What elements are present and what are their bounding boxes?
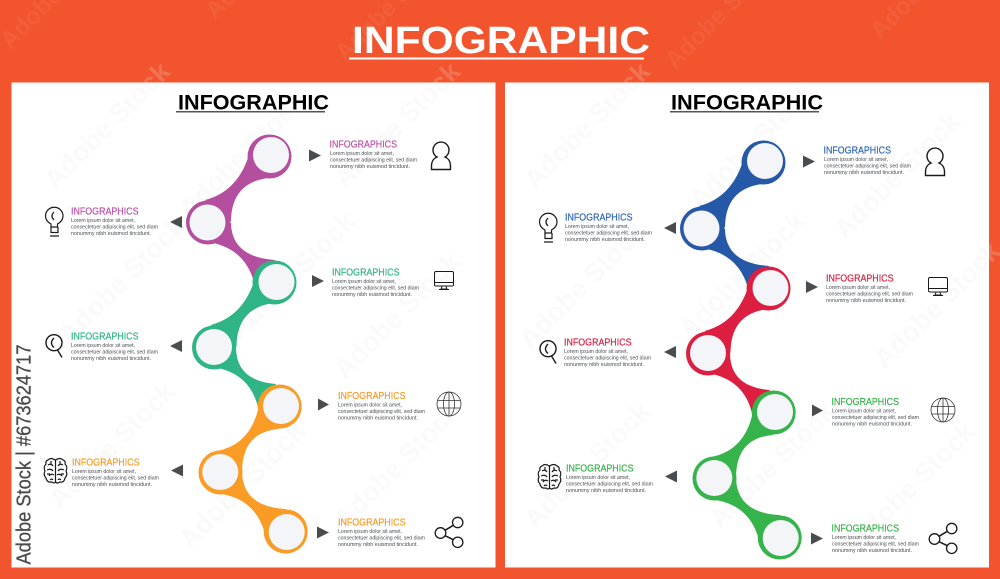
text block 1 xyxy=(824,146,912,176)
chain inner circles xyxy=(190,137,305,550)
watermarks right panel: Adobe Stock xyxy=(518,56,657,194)
watermarks left panel: Adobe Stock xyxy=(38,56,177,194)
text block 4 xyxy=(564,338,652,368)
watermarks right panel xyxy=(513,56,1000,554)
text block 7: INFOGRAPHICS xyxy=(832,524,899,534)
text block 7: consectetuer adipiscing elit, sed diam xyxy=(338,536,426,542)
text block 3: nonummy nibh euismod tincidunt. xyxy=(826,298,906,304)
panel heading: INFOGRAPHIC xyxy=(671,92,823,114)
watermarks left panel: Adobe Stock xyxy=(328,246,467,384)
text block 6: Lorem ipsum dolor sit amet, xyxy=(72,469,136,475)
text block 2: INFOGRAPHICS xyxy=(565,212,633,224)
icon: share xyxy=(929,523,957,554)
watermarks left panel: Adobe Stock xyxy=(223,206,362,344)
text block 2: nonummy nibh euismod tincidunt. xyxy=(565,237,645,243)
text block 1: consectetuer adipiscing elit, sed diam xyxy=(824,164,912,170)
text block 6: Lorem ipsum dolor sit amet, xyxy=(566,475,630,481)
icon: magnifier xyxy=(46,335,62,358)
arrows xyxy=(170,150,329,538)
text block 6 xyxy=(72,458,160,488)
vertical stock credit: Adobe Stock | #673624717 xyxy=(14,344,36,564)
text block 5: Lorem ipsum dolor sit amet, xyxy=(338,402,402,408)
chain inner circles xyxy=(684,143,799,556)
panel: right xyxy=(505,56,1000,567)
watermarks right panel: Adobe Stock xyxy=(683,76,822,214)
text block 4: Lorem ipsum dolor sit amet, xyxy=(71,343,135,349)
text block 7 xyxy=(832,524,920,554)
text block 3: consectetuer adipiscing elit, sed diam xyxy=(332,286,420,292)
icon: brain xyxy=(538,464,561,489)
watermarks on background xyxy=(0,0,937,74)
icon: person xyxy=(926,148,944,176)
text block 4: nonummy nibh euismod tincidunt. xyxy=(564,362,644,368)
text block 3: Lorem ipsum dolor sit amet, xyxy=(332,279,396,285)
watermarks right panel: Adobe Stock xyxy=(518,396,657,534)
watermarks left panel: Adobe Stock xyxy=(328,396,467,534)
chain: green segment xyxy=(192,260,296,407)
text block 7 xyxy=(338,518,426,548)
text block 2: INFOGRAPHICS xyxy=(71,206,139,218)
text block 3: Lorem ipsum dolor sit amet, xyxy=(826,285,890,291)
text block 7: nonummy nibh euismod tincidunt. xyxy=(832,548,912,554)
panel: left xyxy=(12,56,496,567)
text block 3: nonummy nibh euismod tincidunt. xyxy=(332,292,412,298)
text block 6: INFOGRAPHICS xyxy=(72,458,140,468)
text block 3: INFOGRAPHICS xyxy=(826,274,894,284)
text block 5: consectetuer adipiscing elit, sed diam xyxy=(338,409,426,415)
watermarks right panel: Adobe Stock xyxy=(513,216,652,354)
text block 1: nonummy nibh euismod tincidunt. xyxy=(330,164,410,170)
arrows xyxy=(664,156,823,544)
text block 1: Lorem ipsum dolor sit amet, xyxy=(824,157,888,163)
watermarks right panel: Adobe Stock xyxy=(843,416,982,554)
watermarks left panel: Adobe Stock xyxy=(43,376,182,514)
icon: globe xyxy=(437,392,461,416)
text block 2: consectetuer adipiscing elit, sed diam xyxy=(71,224,159,230)
icon: monitor xyxy=(434,272,454,290)
chain: red segment xyxy=(686,266,790,413)
text block 2: Lorem ipsum dolor sit amet, xyxy=(565,224,629,230)
text block 3: consectetuer adipiscing elit, sed diam xyxy=(826,292,914,298)
watermarks left panel xyxy=(38,56,467,554)
text block 1 xyxy=(330,140,418,170)
text block 5: Lorem ipsum dolor sit amet, xyxy=(832,408,896,414)
text block 7: consectetuer adipiscing elit, sed diam xyxy=(832,542,920,548)
watermarks left panel: Adobe Stock xyxy=(173,86,312,224)
chain: orange segment xyxy=(198,384,308,554)
watermarks right panel: Adobe Stock xyxy=(828,106,967,244)
text block 2: nonummy nibh euismod tincidunt. xyxy=(71,231,151,237)
text block 5 xyxy=(338,391,426,422)
watermarks right panel: Adobe Stock xyxy=(703,396,842,534)
icon: share xyxy=(435,517,463,548)
icon: brain xyxy=(44,458,67,483)
chain: blue segment xyxy=(680,140,786,288)
text block 5: consectetuer adipiscing elit, sed diam xyxy=(832,415,920,421)
text block 1: INFOGRAPHICS xyxy=(330,140,397,150)
text block 7: INFOGRAPHICS xyxy=(338,518,406,528)
text block 4 xyxy=(71,332,159,362)
icon: magnifier xyxy=(540,341,556,364)
watermarks left panel: Adobe Stock xyxy=(328,56,467,194)
text block 4: nonummy nibh euismod tincidunt. xyxy=(71,356,151,362)
chain: purple segment xyxy=(186,134,292,282)
panel heading: INFOGRAPHIC xyxy=(178,92,329,114)
text block 4: consectetuer adipiscing elit, sed diam xyxy=(71,350,159,356)
text block 4: Lorem ipsum dolor sit amet, xyxy=(564,349,628,355)
text block 4: INFOGRAPHICS xyxy=(71,332,139,342)
text block 6: nonummy nibh euismod tincidunt. xyxy=(566,488,646,494)
text block 2 xyxy=(71,206,159,237)
text block 4: consectetuer adipiscing elit, sed diam xyxy=(564,356,652,362)
text block 3: INFOGRAPHICS xyxy=(332,268,400,278)
text block 5: INFOGRAPHICS xyxy=(832,397,899,408)
text block 5: nonummy nibh euismod tincidunt. xyxy=(832,422,912,428)
main title: INFOGRAPHIC xyxy=(352,20,650,62)
text block 1: nonummy nibh euismod tincidunt. xyxy=(824,170,904,176)
text block 5: INFOGRAPHICS xyxy=(338,391,406,402)
text block 3 xyxy=(332,268,420,298)
text block 6: consectetuer adipiscing elit, sed diam xyxy=(72,476,160,482)
icon: light bulb xyxy=(540,213,557,242)
text block 6: consectetuer adipiscing elit, sed diam xyxy=(566,482,654,488)
text block 7: Lorem ipsum dolor sit amet, xyxy=(338,529,402,535)
text block 2: consectetuer adipiscing elit, sed diam xyxy=(565,230,653,236)
chain: green segment xyxy=(692,390,802,560)
icon: light bulb xyxy=(46,207,63,236)
watermarks left panel: Adobe Stock xyxy=(173,416,312,554)
text block 4: INFOGRAPHICS xyxy=(564,338,632,348)
text block 1: consectetuer adipiscing elit, sed diam xyxy=(330,158,418,164)
text block 7: Lorem ipsum dolor sit amet, xyxy=(832,535,896,541)
text block 1: Lorem ipsum dolor sit amet, xyxy=(330,151,394,157)
icon: globe xyxy=(931,398,955,422)
watermarks left panel: Adobe Stock xyxy=(53,211,192,349)
text block 2: Lorem ipsum dolor sit amet, xyxy=(71,218,135,224)
text block 1: INFOGRAPHICS xyxy=(824,146,891,156)
text block 6 xyxy=(566,464,654,494)
text block 5: nonummy nibh euismod tincidunt. xyxy=(338,416,418,422)
icon: monitor xyxy=(928,278,948,296)
text block 6: INFOGRAPHICS xyxy=(566,464,634,474)
icon: person xyxy=(432,142,450,170)
text block 6: nonummy nibh euismod tincidunt. xyxy=(72,482,152,488)
text block 2 xyxy=(565,212,653,243)
text block 5 xyxy=(832,397,920,428)
text block 3 xyxy=(826,274,914,304)
text block 7: nonummy nibh euismod tincidunt. xyxy=(338,542,418,548)
watermarks right panel: Adobe Stock xyxy=(673,206,812,344)
